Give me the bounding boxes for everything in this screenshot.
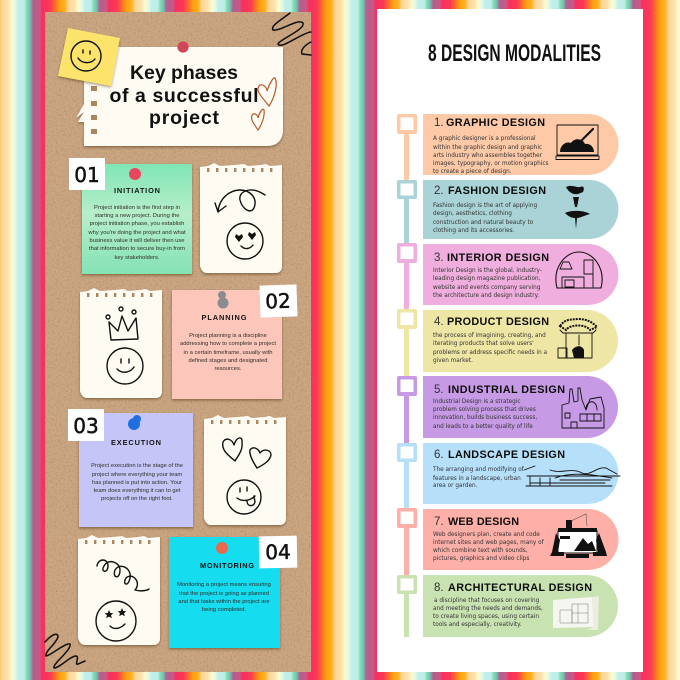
body: projects off on the right foot. xyxy=(101,496,173,502)
body: and that tasks within the project are xyxy=(178,599,270,605)
body xyxy=(177,582,271,613)
body: defined stages and designated xyxy=(189,358,267,364)
body: a discipline that focuses on covering xyxy=(434,598,540,604)
heading: ARCHITECTURAL DESIGN xyxy=(448,582,592,594)
heading: EXECUTION xyxy=(111,438,161,447)
white panel xyxy=(377,9,643,672)
body: resources. xyxy=(214,366,242,372)
body: iterating products that solve users' xyxy=(433,341,534,347)
heading: LANDSCAPE DESIGN xyxy=(448,449,565,461)
body: to create living spaces, using certain xyxy=(433,614,539,620)
body xyxy=(433,598,543,628)
cork texture xyxy=(45,12,311,672)
body: project where everything your team xyxy=(92,472,182,478)
body: addressing how to complete a project xyxy=(180,341,276,347)
title: of a successful xyxy=(110,85,258,107)
heading: 5. xyxy=(434,384,444,396)
pin xyxy=(218,291,228,308)
heading: 1. xyxy=(434,117,444,129)
timeline marker xyxy=(397,243,417,312)
body xyxy=(433,136,549,175)
row 7 web design xyxy=(397,508,618,581)
body: which combine text with sounds, xyxy=(433,548,528,554)
row 1 graphic design xyxy=(397,114,618,180)
body xyxy=(433,532,545,562)
torn paper: crown and smiley xyxy=(80,288,162,398)
body: problem solving process that drives xyxy=(433,407,536,413)
body: website and events company serving xyxy=(433,285,541,291)
body: clothing and its accessories. xyxy=(433,228,515,234)
heading: 7. xyxy=(434,516,444,528)
timeline marker xyxy=(397,114,417,180)
sticky note with smiley xyxy=(58,28,120,86)
timeline marker xyxy=(397,180,417,245)
icon: hearts xyxy=(252,78,276,130)
icon: kitchen in dome xyxy=(556,252,602,288)
body: and meeting the needs and demands, xyxy=(433,606,543,612)
pill xyxy=(423,575,618,637)
body: A graphic designer is a professional xyxy=(433,136,536,142)
number tag 02: 02 xyxy=(265,289,291,313)
heading: WEB DESIGN xyxy=(448,516,519,528)
body: that the project is going as planned xyxy=(179,591,269,597)
note background xyxy=(82,164,192,274)
title: Key phases xyxy=(130,62,238,84)
body: has planned is put into action. Your xyxy=(92,480,182,486)
body: images, typography, or motion graphics xyxy=(433,161,549,167)
body: business value it will deliver then use xyxy=(89,238,185,244)
heading: PLANNING xyxy=(202,313,247,322)
heading: GRAPHIC DESIGN xyxy=(446,117,545,129)
heading: 8. xyxy=(434,582,444,594)
row 6 landscape design xyxy=(397,443,620,510)
icon: factory xyxy=(562,388,604,428)
number tag 03: 03 xyxy=(73,414,99,438)
pill xyxy=(423,376,618,438)
panel: 8 design modalities xyxy=(377,9,643,672)
number tag 04: 04 xyxy=(265,540,291,564)
body xyxy=(180,333,276,372)
note 02 planning xyxy=(172,284,298,399)
body xyxy=(433,203,538,234)
icon: landscape sketch xyxy=(524,466,620,486)
heading: 2. xyxy=(434,185,444,197)
pill xyxy=(423,310,618,372)
note background xyxy=(79,413,193,527)
body: Project planning is a discipline xyxy=(189,333,267,339)
pin xyxy=(128,415,141,430)
body: Project execution is the stage of the xyxy=(91,463,183,469)
scribble: top right xyxy=(272,13,311,55)
body: the process of imagining, creating, and xyxy=(433,333,546,339)
icon: blueprint xyxy=(553,596,599,630)
torn paper: spiral and star-eye smiley xyxy=(78,535,160,645)
body: Interior Design is the global, industry- xyxy=(433,268,542,274)
number tag 01: 01 xyxy=(74,163,100,187)
pill xyxy=(423,509,618,570)
icon: laptop with paintbrush xyxy=(556,125,599,160)
timeline marker xyxy=(397,443,417,510)
body xyxy=(433,333,547,364)
body: project initiation phase, you establish xyxy=(90,221,184,227)
body: innovation, builds business success, xyxy=(433,415,537,421)
timeline marker xyxy=(397,309,417,377)
body: pictures, graphics and video clips xyxy=(433,556,529,562)
body: in a certain timeframe, usually with xyxy=(184,350,272,356)
pill xyxy=(423,114,618,175)
torn paper: swirl and heart-eye smiley xyxy=(200,163,282,273)
body xyxy=(433,399,537,430)
body: problems or address specific needs in a xyxy=(433,350,547,356)
body: that information to secure buy-in from xyxy=(89,246,185,252)
body: within the graphic design and graphic xyxy=(433,145,542,151)
title xyxy=(110,62,258,129)
body: tools and especially, creativity. xyxy=(433,622,522,628)
heading: 3. xyxy=(434,252,444,264)
note 04 monitoring xyxy=(169,536,297,648)
icon: open box with gears xyxy=(558,319,597,358)
body xyxy=(432,467,525,489)
note 01 initiation xyxy=(69,158,192,274)
body: arts industry who assembles together xyxy=(433,153,543,159)
title: project xyxy=(149,107,220,129)
body xyxy=(433,268,542,299)
title pin xyxy=(177,41,189,53)
body: Monitoring a project means ensuring xyxy=(177,582,271,588)
timeline marker xyxy=(397,376,417,444)
pill xyxy=(423,180,618,239)
body: Industrial Design is a strategic xyxy=(433,399,521,405)
heading: 6. xyxy=(434,449,444,461)
body: internet sites and web pages, many of xyxy=(433,540,545,546)
heading: INITIATION xyxy=(114,186,160,195)
scribble: bottom left xyxy=(45,634,85,668)
icon: dancer xyxy=(565,186,590,229)
body: key stakeholders. xyxy=(114,255,160,261)
pin xyxy=(216,542,228,554)
note background xyxy=(172,290,282,399)
pin xyxy=(129,168,141,180)
heading: FASHION DESIGN xyxy=(448,185,546,197)
body: The arranging and modifying of xyxy=(432,467,525,473)
heading: 4. xyxy=(434,316,444,328)
body: being completed. xyxy=(202,607,246,613)
body: Fashion design is the art of applying xyxy=(433,203,538,209)
body: Web designers plan, create and code xyxy=(433,532,540,538)
pill xyxy=(423,244,618,305)
row 4 product design xyxy=(397,309,618,377)
row 5 industrial design xyxy=(397,376,618,444)
body: and leads to a better quality of life xyxy=(433,424,533,430)
row 2 fashion design xyxy=(397,180,618,245)
panel: key phases corkboard xyxy=(45,12,311,672)
note 03 execution xyxy=(68,409,193,527)
body: why you're doing the project and what xyxy=(87,230,186,236)
body: construction and natural beauty to xyxy=(433,220,534,226)
note background xyxy=(169,537,280,648)
title note paper xyxy=(76,47,283,146)
body: starting a new project. During the xyxy=(94,213,180,219)
timeline marker xyxy=(397,575,417,637)
body: features in a landscape, urban xyxy=(433,476,521,482)
body: leading design magazine publication, xyxy=(433,276,541,282)
body: the architecture and design industry. xyxy=(433,293,539,299)
body xyxy=(87,205,186,261)
row 3 interior design xyxy=(397,243,618,312)
icon: web designers xyxy=(550,514,607,558)
row 8 architectural design xyxy=(397,575,618,637)
heading: INTERIOR DESIGN xyxy=(447,252,549,264)
pill xyxy=(423,443,618,504)
body: given market. xyxy=(433,358,473,364)
heading: MONITORING xyxy=(200,561,254,570)
body: area or garden. xyxy=(433,483,478,489)
torn paper: hearts and tongue smiley xyxy=(204,415,286,525)
timeline marker xyxy=(397,508,417,581)
heading: INDUSTRIAL DESIGN xyxy=(448,384,565,396)
body: Project initiation is the first step in xyxy=(94,205,180,211)
body: to create a piece of design. xyxy=(433,169,512,175)
body: team does everything it can to get xyxy=(93,488,181,494)
body xyxy=(91,463,183,502)
body: design, aesthetics, clothing xyxy=(433,211,512,217)
heading: PRODUCT DESIGN xyxy=(447,316,549,328)
